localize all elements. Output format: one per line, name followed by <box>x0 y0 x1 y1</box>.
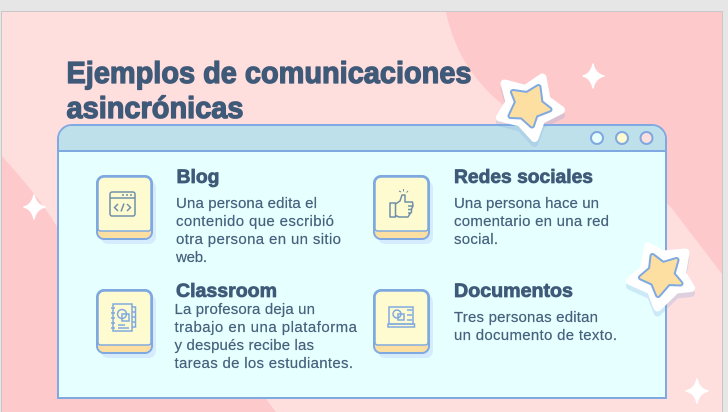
text: Redes sociales description <box>454 195 609 248</box>
item: Documentos <box>374 280 617 358</box>
text: Classroom description: tareas de los estudiantes. <box>174 355 353 372</box>
text: Documentos description: un documento de texto. <box>454 327 617 344</box>
sparkle: top right <box>583 64 604 88</box>
title: asincrónicas <box>66 90 244 125</box>
text: Classroom description: y después recibe las <box>174 337 314 354</box>
item: Redes sociales <box>374 166 609 248</box>
icon card: Classroom <box>97 290 156 358</box>
text: Redes sociales description: social. <box>454 231 498 248</box>
text: Blog description: Una persona edita el <box>176 195 317 212</box>
heading: Classroom: Classroom <box>176 280 277 302</box>
window control dots <box>591 132 652 144</box>
star: right <box>630 246 691 312</box>
text: Blog description <box>175 195 341 266</box>
sparkle: left <box>24 195 45 219</box>
text: Documentos description: Tres personas editan <box>454 309 598 326</box>
sparkle: bottom right <box>686 379 708 403</box>
icon card: Blog <box>97 176 156 244</box>
icon card: Redes sociales <box>374 176 433 244</box>
heading: Blog: Blog <box>176 166 220 188</box>
heading: Redes sociales: Redes sociales <box>454 166 593 188</box>
text: Classroom description: trabajo en una plataforma <box>174 319 358 336</box>
text: Blog description: otra persona en un sitio <box>176 231 341 248</box>
text: Classroom description: La profesora deja un <box>174 301 315 318</box>
item: Blog <box>97 166 341 266</box>
text: Classroom description <box>174 301 358 372</box>
icon: code window <box>110 192 135 216</box>
title <box>66 55 472 125</box>
text: Blog description: web. <box>175 249 207 266</box>
browser window panel <box>58 125 666 398</box>
star: top <box>500 78 561 143</box>
icon: notebook <box>111 304 136 331</box>
icon: thumbs up <box>390 189 413 217</box>
text: Blog description: contenido que escribió <box>176 213 334 230</box>
heading: Documentos: Documentos <box>454 280 573 302</box>
icon: laptop document <box>388 307 414 327</box>
text: Redes sociales description: comentario en una red <box>454 213 609 230</box>
title: Ejemplos de comunicaciones <box>66 55 472 90</box>
text: Documentos description <box>454 309 617 344</box>
icon card: Documentos <box>374 290 433 358</box>
text: Redes sociales description: Una persona hace un <box>454 195 599 212</box>
item: Classroom <box>97 280 358 372</box>
